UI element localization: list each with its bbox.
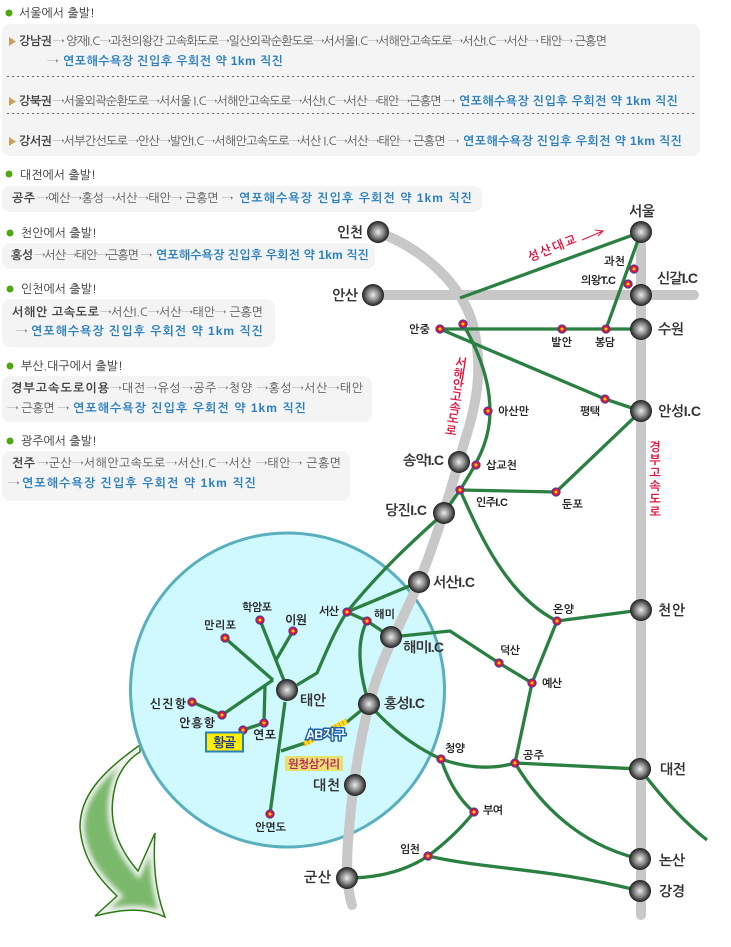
town dots [188, 265, 638, 860]
route: Gangseo area [9, 134, 682, 148]
label: Seongsan Bridge with red arrow [526, 230, 603, 264]
minor place labels: 과천 [604, 255, 625, 268]
minor place labels: 임천 [400, 843, 420, 856]
route: Gangnam area [9, 34, 607, 68]
panel: departing from Cheonan: 홍성 [11, 248, 33, 261]
panel: departing from Incheon [2, 282, 275, 347]
panel: departing from Cheonan: 연포해수욕장 진입후 우회전 약 1km 직진 [156, 248, 369, 262]
major place labels: 인천 [337, 224, 363, 240]
route: Gangseo area: 연포해수욕장 진입후 우회전 약 1km 직진 [463, 134, 682, 148]
major place labels [300, 203, 701, 899]
label: Gyeongbu Expressway [649, 440, 661, 519]
panel: departing from Incheon: → [16, 325, 28, 337]
label: West Coast Expressway [444, 355, 468, 439]
major place labels: 논산 [659, 852, 686, 868]
minor place labels: 서산 [319, 605, 339, 618]
major place labels: 수원 [658, 321, 684, 337]
major place labels: 대천 [313, 777, 340, 793]
route: Gangbuk area [9, 94, 678, 108]
label: Gyeongbu Expressway: 로 [649, 505, 661, 519]
minor place labels: 둔포 [562, 499, 584, 511]
label box: Woncheong junction: 원청삼거리 [288, 758, 340, 771]
panel: departing from Incheon: 인천에서 출발! [21, 282, 97, 295]
major place labels: 신갈I.C [657, 270, 698, 286]
panel: departing from Incheon: 서해안 고속도로 [12, 305, 100, 318]
label: West Coast Expressway: 고 [449, 389, 463, 405]
minor place labels: 청양 [445, 742, 466, 755]
label: Gyeongbu Expressway: 경 [649, 440, 661, 454]
panel: departing from Gwangju: → [8, 477, 20, 489]
panel: departing from Cheonan: →서산→태안→근흥면 → [34, 249, 153, 261]
minor place labels: 봉담 [595, 336, 616, 349]
label box: Hwanggol [206, 732, 243, 752]
minor place labels: 덕산 [500, 644, 520, 657]
route: Gangbuk area: 연포해수욕장 진입후 우회전 약 1km 직진 [459, 94, 678, 108]
minor place labels: 부여 [483, 804, 503, 817]
panel: departing from Busan and Daegu: 경부고속도로이용 [11, 381, 110, 394]
major place labels: 해미I.C [403, 639, 444, 655]
minor place labels: 발안 [551, 336, 573, 349]
label: Gyeongbu Expressway: 부 [649, 453, 661, 467]
panel: departing from Busan and Daegu: 연포해수욕장 진입후 우회전 약 1km 직진 [73, 401, 306, 415]
panel: departing from Busan and Daegu: 부산.대구에서 출발! [21, 359, 123, 372]
panel: departing from Gwangju: 전주 [12, 456, 36, 469]
route: Gangnam area: 연포해수욕장 진입후 우회전 약 1km 직진 [63, 54, 283, 68]
minor place labels: 안흥항 [179, 716, 216, 730]
major place labels: 홍성I.C [384, 695, 425, 711]
major place labels: 서울 [629, 203, 655, 219]
minor place labels: 해미 [374, 608, 395, 621]
label: Gyeongbu Expressway: 속 [649, 479, 661, 493]
panel: departing from Gwangju [2, 434, 350, 501]
major place labels: 당진I.C [385, 502, 427, 518]
panel: departing from Cheonan [2, 226, 375, 269]
major place labels: 강경 [659, 883, 685, 899]
panel: departing from Cheonan: 천안에서 출발! [21, 226, 97, 239]
minor place labels: 신진항 [150, 697, 187, 711]
minor place labels: 아산만 [498, 405, 530, 418]
panel: departing from Daejeon: 연포해수욕장 진입후 우회전 약 1km 직진 [239, 191, 472, 205]
panel: departing from Gwangju: 광주에서 출발! [21, 434, 97, 447]
minor place labels: 안면도 [255, 821, 287, 834]
route: Gangbuk area: →서울외곽순환도로→서서울 I.C→서해안고속도로→서산I.C→서산→태안→근흥면 → [53, 94, 456, 107]
label: West Coast Expressway: 안 [451, 377, 465, 393]
panel: departing from Daejeon [2, 168, 482, 212]
expressways [347, 232, 694, 915]
minor place labels: 온양 [553, 603, 575, 616]
panel: departing from Daejeon: →예산→홍성→서산→태안→ 근흥면 → [37, 192, 234, 204]
major place labels: 군산 [304, 869, 332, 885]
panel: departing from Daejeon: 공주 [12, 192, 36, 204]
minor place labels: 이원 [285, 613, 307, 627]
minor place labels [150, 255, 625, 856]
heading: Seoul: 서울에서 출발! [19, 6, 95, 19]
route: Gangnam area: → 양재I.C→과천의왕간 고속화도로→일산외곽순환도로→서서울I.C→서해안고속도로→서산I.C→서산→ 태안→ 근흥면 [53, 34, 607, 47]
major place labels: 태안 [300, 692, 327, 708]
interchange nodes [276, 221, 652, 902]
major place labels: 서산I.C [433, 574, 475, 590]
route: Gangseo area: 강서권 [19, 134, 52, 147]
panel: departing from Gwangju: 연포해수욕장 진입후 우회전 약 1km 직진 [22, 476, 256, 490]
label: Gyeongbu Expressway: 고 [649, 466, 661, 480]
panel: departing from Busan and Daegu [2, 359, 372, 422]
label: AB district: AB지구 [306, 727, 346, 742]
icon: large green curved arrow [80, 745, 165, 917]
label: West Coast Expressway: 서 [454, 355, 468, 371]
label: West Coast Expressway: 도 [446, 411, 460, 427]
minor place labels: 만리포 [204, 619, 237, 632]
minor place labels: 인주I.C [476, 496, 508, 509]
panel: departing from Daejeon: 대전에서 출발! [20, 168, 96, 181]
minor place labels: 삽교천 [486, 459, 517, 472]
minor place labels: 연포 [253, 728, 277, 742]
green local roads [192, 232, 707, 891]
label: Gyeongbu Expressway: 도 [649, 492, 661, 506]
route: Gangbuk area: 강북권 [19, 94, 52, 107]
major place labels: 대전 [660, 761, 686, 777]
minor place labels: 안중 [409, 323, 431, 336]
major place labels: 안산 [332, 287, 359, 303]
minor place labels: 공주 [523, 750, 545, 762]
yellow dotted road section: AB district [304, 721, 347, 744]
minor place labels: 평택 [580, 405, 600, 418]
label box: Hwanggol: 황골 [213, 735, 236, 750]
label: Seongsan Bridge with red arrow: 성산대교 [526, 232, 580, 264]
label: West Coast Expressway: 속 [448, 400, 462, 416]
route: Gangseo area: →서부간선도로→안산→발안I.C→서해안고속도로→서산 I.C→서산→태안→ 근흥면 → [53, 134, 460, 147]
route: Gangnam area: → [47, 55, 59, 67]
major place labels: 송악I.C [403, 452, 444, 468]
major place labels: 천안 [658, 602, 686, 618]
panel: departing from Seoul [2, 6, 700, 156]
panel: departing from Busan and Daegu: → 근흥면 → [7, 402, 70, 414]
panel: departing from Gwangju: →군산→서해안고속도로→서산I.C→서산 →태안→ 근흥면 [37, 456, 341, 469]
panel: departing from Incheon: →서산I.C→서산→태안→ 근흥면 [100, 306, 263, 318]
panel: departing from Incheon: 연포해수욕장 진입후 우회전 약 1km 직진 [31, 324, 263, 338]
minor place labels: 의왕T.C [581, 274, 616, 287]
minor place labels: 예산 [542, 677, 562, 690]
label: West Coast Expressway: 로 [444, 423, 458, 439]
minor place labels: 학암포 [242, 601, 273, 614]
highlighted circle: Taean area [130, 533, 444, 847]
label: West Coast Expressway: 해 [452, 366, 466, 382]
panel: departing from Busan and Daegu: →대전→유성→공주→청양 →홍성→서산→태안 [110, 382, 363, 394]
major place labels: 안성I.C [658, 403, 701, 419]
panel background: Seoul routes [2, 24, 700, 156]
route: Gangnam area: 강남권 [19, 34, 52, 47]
